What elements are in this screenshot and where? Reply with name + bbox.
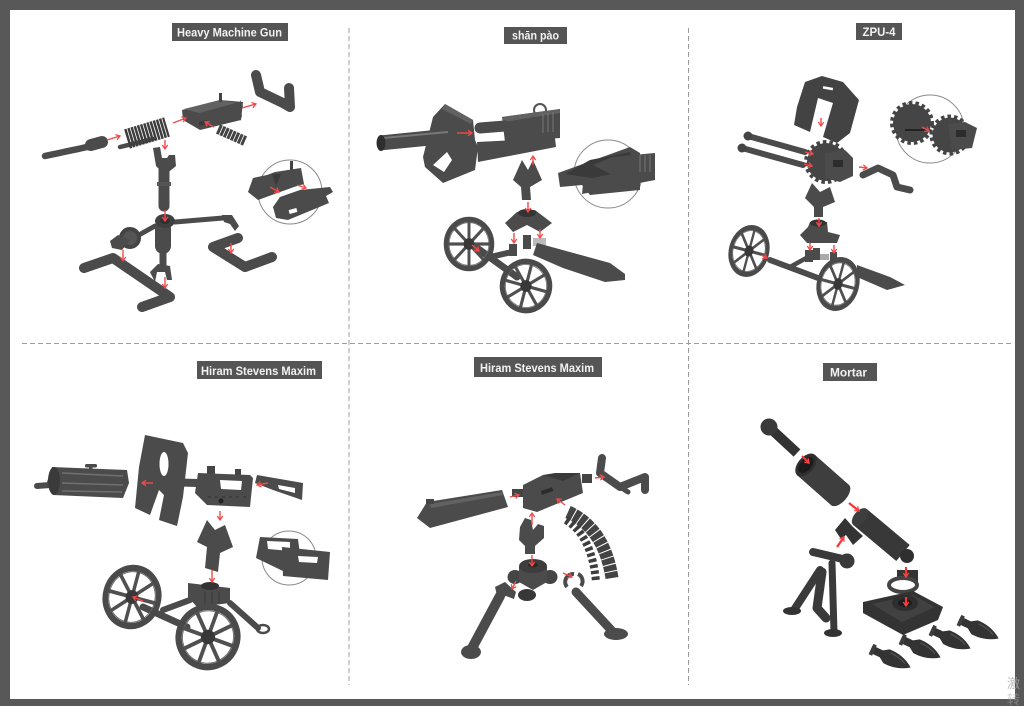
part: rear handle (256, 75, 290, 107)
part: gun shield (135, 435, 188, 526)
part: crank handle (863, 168, 910, 190)
part: right wheel (497, 256, 555, 316)
heading: shan pao (504, 27, 567, 44)
heading: ZPU-4: ZPU-4 (862, 27, 896, 39)
part: twin barrels (738, 132, 805, 165)
panel: shan pao (376, 27, 655, 316)
part: left leg (461, 582, 516, 659)
part: axle and trail (477, 235, 625, 282)
part: sight ring (889, 570, 918, 592)
part: barrel (376, 132, 450, 151)
part: fork post (153, 147, 176, 206)
part: rail body (477, 138, 556, 162)
detail circle: receiver close-up (248, 160, 333, 224)
heading: Hiram Stevens Maxim: Hiram Stevens Maxim (201, 366, 316, 378)
part: feed clip (218, 129, 245, 141)
part: receiver (512, 473, 592, 512)
part: water jacket cylinder (37, 464, 129, 498)
part: fork post (519, 518, 544, 554)
part: gear and receiver (806, 142, 853, 182)
part: base plate (863, 591, 943, 635)
heading: ZPU-4 (856, 23, 902, 40)
part: muzzle barrel (45, 142, 102, 156)
part: upper tube (791, 450, 854, 510)
part: carriage (143, 582, 269, 633)
heading: Hiram Stevens Maxim (197, 361, 322, 379)
part: left wheel (725, 223, 773, 279)
part: Y mount (513, 160, 542, 200)
panel: Hiram Stevens Maxim wheeled (37, 361, 330, 675)
part: bipod (783, 552, 854, 637)
part: tripod hub and arms (110, 214, 239, 282)
part: top muzzle (760, 418, 797, 453)
assembly arrows (457, 133, 540, 251)
part: hub (508, 559, 558, 601)
part: left wheel (446, 219, 492, 269)
detail circle: breech close-up (558, 140, 655, 208)
part: ammunition belt (566, 512, 612, 582)
part: bipod clamp (835, 518, 863, 545)
panel: ZPU-4 (725, 23, 977, 313)
part: right wheel (813, 255, 863, 313)
panel: Hiram Stevens Maxim tripod (417, 357, 645, 659)
heading: Hiram Stevens Maxim (474, 357, 602, 377)
watermark (1007, 676, 1020, 706)
detail circle: receiver close-up (256, 531, 330, 585)
part: rear handle (600, 458, 645, 492)
part: Y mount (805, 183, 835, 217)
part: mortar shells (868, 613, 1002, 674)
part: lower tube (849, 505, 914, 563)
part: hub (800, 220, 840, 243)
heading: Mortar: Mortar (830, 368, 868, 380)
assembly arrows (802, 456, 906, 606)
heading: Mortar (823, 363, 877, 381)
part: rear loop grip (255, 475, 303, 500)
part: right leg (565, 574, 628, 640)
part: cylinder block (480, 109, 560, 142)
part: receiver (195, 466, 253, 507)
watermark: 激 (1007, 676, 1020, 691)
part: Y mount (197, 520, 233, 572)
part: right wheel (170, 599, 246, 675)
panel: Heavy Machine Gun (45, 23, 333, 307)
part: coil spring (120, 127, 167, 147)
part: right foot stand (213, 238, 272, 267)
part: receiver (182, 93, 243, 130)
assembly arrows (107, 104, 306, 288)
heading: Heavy Machine Gun: Heavy Machine Gun (177, 28, 282, 40)
heading: shan pao: shān pào (512, 30, 559, 42)
heading: Hiram Stevens Maxim: Hiram Stevens Maxim (480, 363, 594, 375)
part: carriage (770, 248, 905, 290)
assembly arrows (761, 118, 929, 258)
part: left foot stand (84, 258, 170, 307)
part: connector (163, 482, 197, 483)
part: shield (794, 76, 859, 143)
panel: Mortar (760, 363, 1002, 674)
detail circle: gear close-up (892, 95, 977, 163)
heading: Heavy Machine Gun (172, 23, 288, 41)
assembly arrows (133, 483, 268, 601)
part: top wheel (534, 104, 546, 116)
part: left wheel (99, 562, 165, 632)
part: hub (505, 209, 552, 232)
part: barrel jacket (417, 490, 508, 528)
part: gun shield (423, 104, 478, 183)
assembly arrows (510, 477, 604, 589)
